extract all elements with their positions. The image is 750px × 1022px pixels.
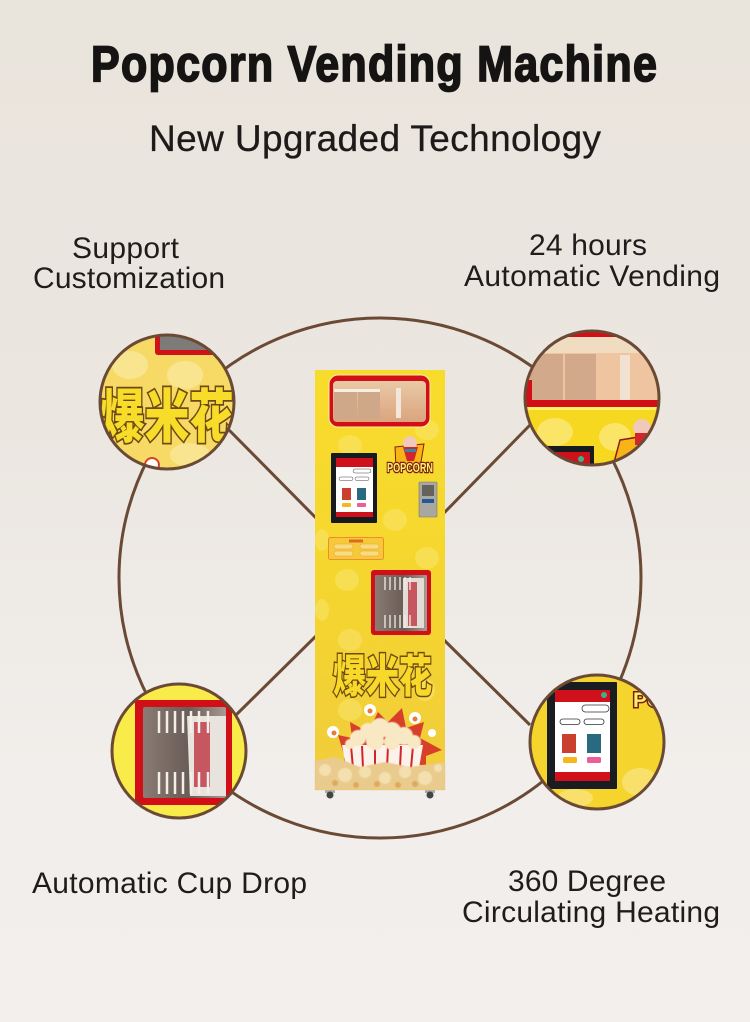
connector lines — [229, 425, 530, 725]
top window — [329, 375, 430, 427]
callout circle: cup drop detail — [112, 684, 246, 818]
vending machine — [315, 370, 445, 798]
large connecting ring — [119, 318, 641, 838]
title: Popcorn Vending Machine — [91, 36, 657, 92]
chinese lettering: 爆米花 — [333, 640, 432, 705]
callout circle: product window detail — [525, 330, 659, 476]
popcorn logo: POPCORN — [387, 460, 433, 475]
popcorn logo — [387, 436, 433, 475]
label: 24 hours automatic vending — [464, 229, 720, 293]
label: 24 hours automatic vending: Automatic Vending — [464, 260, 720, 293]
label: 360 degree circulating heating — [462, 865, 720, 929]
cup window — [371, 570, 431, 635]
callout circle: lettering detail — [100, 325, 234, 472]
label: support customization: Support — [72, 232, 180, 265]
coin acceptor — [419, 482, 437, 517]
wheels — [325, 790, 435, 798]
callout circle: touch screen detail — [530, 675, 664, 809]
popcorn pile — [315, 757, 445, 790]
label: 360 degree circulating heating: 360 Degree — [508, 865, 666, 898]
touch screen — [331, 453, 377, 523]
body watermark — [315, 420, 439, 721]
machine body — [315, 370, 445, 790]
callout circle: touch screen detail: PO — [633, 689, 663, 712]
label: support customization: Customization — [33, 262, 225, 295]
label: 360 degree circulating heating: Circulating Heating — [462, 896, 720, 929]
subtitle: New Upgraded Technology — [149, 118, 602, 159]
label: 24 hours automatic vending: 24 hours — [529, 229, 647, 262]
label: support customization — [33, 232, 225, 295]
instruction panel — [328, 538, 384, 560]
popcorn burst — [327, 704, 442, 768]
callout circle: lettering detail: 爆米花 — [100, 370, 234, 454]
label: automatic cup drop: Automatic Cup Drop — [32, 867, 307, 900]
